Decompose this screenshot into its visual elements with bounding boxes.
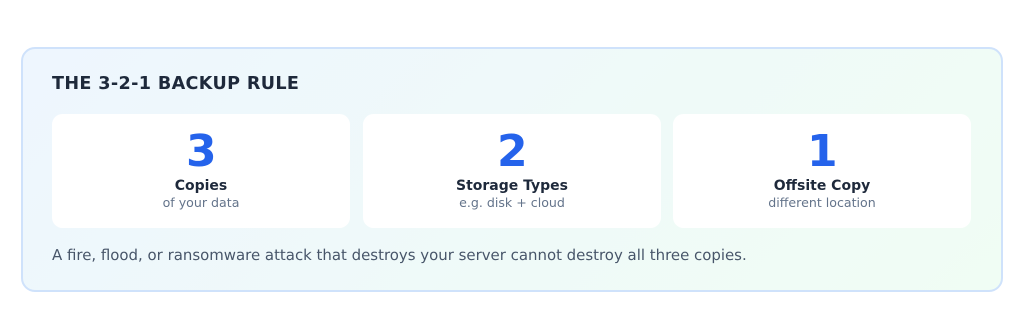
note text: A fire, flood, or ransomware attack that destroys your server cannot destroy all three copies. xyxy=(52,246,747,264)
panel: 3-2-1 backup rule xyxy=(21,47,1003,292)
number 1: 1 xyxy=(807,126,838,177)
sublabel: of your data: of your data xyxy=(163,195,239,210)
label: offsite copy: Offsite Copy xyxy=(774,178,870,194)
sublabel: disk and cloud: e.g. disk + cloud xyxy=(459,195,565,210)
card: 1 offsite copy xyxy=(673,114,971,228)
card: 3 copies xyxy=(52,114,350,228)
number 2: 2 xyxy=(497,126,528,177)
number 3: 3 xyxy=(186,126,217,177)
label: copies: Copies xyxy=(175,178,227,194)
sublabel: different location: different location xyxy=(768,195,876,210)
title: THE 3-2-1 BACKUP RULE xyxy=(52,74,299,94)
card: 2 storage types xyxy=(363,114,661,228)
label: storage types: Storage Types xyxy=(456,178,568,194)
